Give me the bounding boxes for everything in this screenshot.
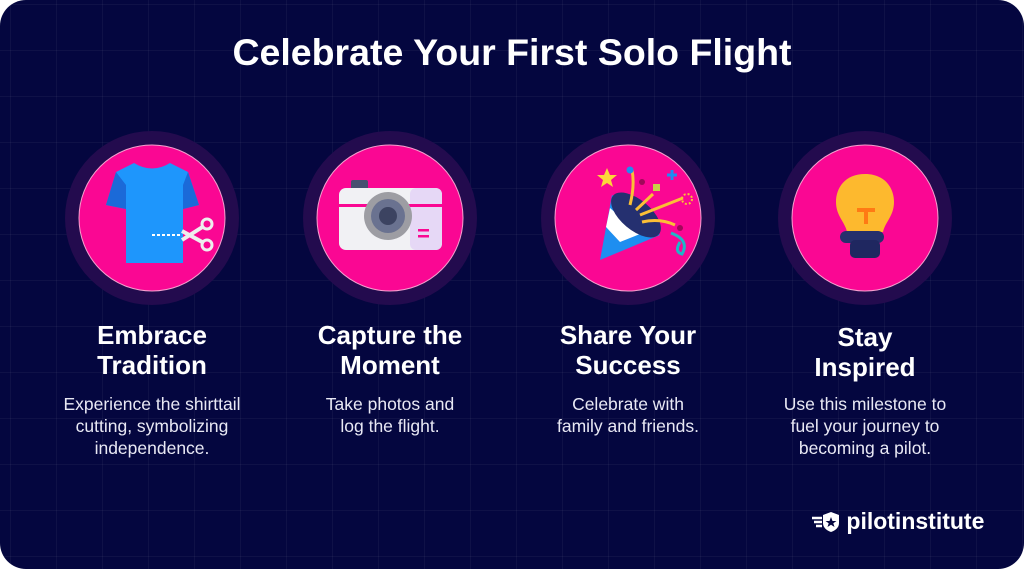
panel: share your success: Celebrate with — [572, 394, 684, 414]
panel: stay inspired: Inspired — [814, 352, 916, 382]
panel: capture the moment: Take photos and — [326, 394, 454, 414]
panel: stay inspired — [778, 131, 952, 458]
icon: camera — [303, 131, 477, 305]
panel: stay inspired: Stay — [838, 322, 892, 352]
panel: share your success: Success — [575, 350, 681, 380]
icon: shirt with scissors — [65, 131, 239, 305]
panel: stay inspired: fuel your journey to — [791, 416, 939, 436]
panel: capture the moment: Capture the — [318, 320, 462, 350]
panel: capture the moment: log the flight. — [340, 416, 440, 436]
panel: share your success — [541, 131, 715, 436]
panel: embrace tradition: Embrace — [97, 320, 207, 350]
icon: party popper — [541, 131, 715, 305]
panel: capture the moment — [303, 131, 477, 436]
panel: share your success: family and friends. — [557, 416, 699, 436]
panel: stay inspired: becoming a pilot. — [799, 438, 931, 458]
panel: capture the moment: Moment — [340, 350, 440, 380]
panel: stay inspired: Use this milestone to — [784, 394, 946, 414]
panel: share your success: Share Your — [560, 320, 696, 350]
title: Celebrate Your First Solo Flight — [232, 31, 792, 73]
panel: embrace tradition: independence. — [95, 438, 209, 458]
logo: pilotinstitute: pilotinstitute — [846, 508, 984, 534]
panel: embrace tradition — [63, 131, 241, 458]
icon: light bulb — [778, 131, 952, 305]
panel: embrace tradition: cutting, symbolizing — [76, 416, 228, 436]
panel: embrace tradition: Tradition — [97, 350, 207, 380]
panel: embrace tradition: Experience the shirttail — [63, 394, 241, 414]
